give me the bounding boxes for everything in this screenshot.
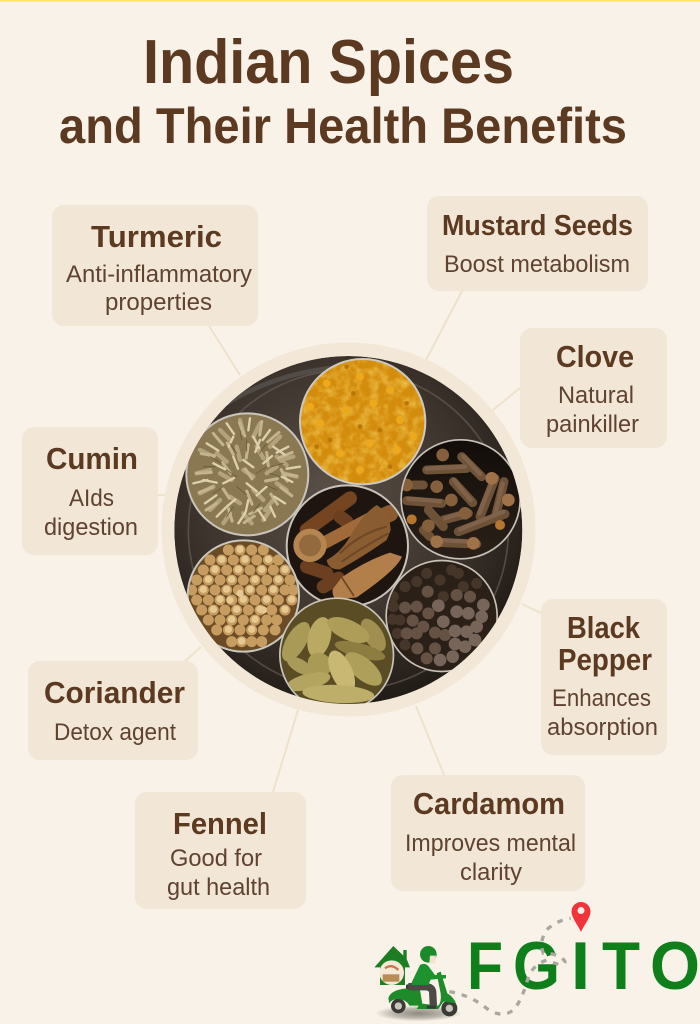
card: turmeric: properties: [105, 289, 212, 316]
connector lines: [158, 291, 541, 792]
tin: cumin: [185, 412, 310, 536]
icon: delivery scooter: [374, 946, 462, 1021]
card: fennel: gut health: [167, 874, 270, 901]
scooter body: [388, 988, 423, 1006]
masala dabba: [174, 356, 522, 713]
card: cardamom: [391, 775, 585, 891]
steel tray: [174, 356, 522, 704]
central spice tray: [162, 342, 536, 716]
card: clove: Natural: [558, 382, 634, 409]
ground shadow: [375, 1005, 462, 1021]
card: black pepper: Pepper: [558, 642, 652, 677]
card: mustard seeds: Boost metabolism: [444, 251, 630, 278]
card: black pepper: Black: [567, 610, 641, 645]
tin: coriander: [187, 539, 300, 653]
card: clove: Clove: [556, 339, 634, 374]
card: fennel: Good for: [170, 845, 262, 872]
house box: [374, 946, 410, 985]
logo: FGITO: [374, 902, 700, 1021]
card: cardamom: Improves mental: [405, 830, 576, 857]
delivery route: [449, 918, 571, 1014]
card: cardamom: Cardamom: [413, 786, 565, 821]
tin: centre bark spice: [286, 484, 409, 608]
icon: map pin: [572, 902, 590, 932]
card: black pepper: absorption: [547, 714, 658, 741]
card: mustard seeds: [427, 196, 648, 291]
top accent line: [0, 0, 700, 2]
tin: clove: [400, 439, 521, 560]
card: black pepper: [541, 599, 667, 755]
card: turmeric: [52, 205, 258, 326]
card: cumin: digestion: [44, 514, 138, 541]
card: cardamom: clarity: [460, 859, 522, 886]
card: coriander: Coriander: [44, 675, 185, 710]
title: Indian Spices: [143, 28, 514, 97]
card: turmeric: Turmeric: [91, 219, 222, 254]
wordmark: I: [571, 928, 590, 1004]
card: cumin: AIds: [69, 485, 114, 512]
card: coriander: [28, 661, 198, 760]
title: and Their Health Benefits: [59, 98, 627, 154]
card: clove: [520, 328, 667, 448]
card: black pepper: Enhances: [552, 685, 651, 712]
card: clove: painkiller: [546, 411, 639, 438]
tin: black pepper: [385, 560, 498, 672]
card: cumin: [22, 427, 158, 555]
card: coriander: Detox agent: [54, 719, 176, 746]
wordmark: G: [513, 928, 560, 1004]
card: mustard seeds: Mustard Seeds: [442, 210, 633, 242]
wordmark: F: [467, 928, 503, 1004]
wordmark: T: [602, 928, 640, 1004]
rider: [408, 987, 433, 1006]
outer cream ring: [162, 342, 536, 716]
wheels: [391, 999, 406, 1013]
card: turmeric: Anti-inflammatory: [66, 261, 252, 288]
card: fennel: [135, 792, 306, 909]
card: fennel: Fennel: [173, 806, 267, 841]
tin: cardamom: [276, 597, 394, 713]
title: [59, 28, 627, 154]
tin: turmeric: [299, 358, 427, 485]
wordmark: [467, 928, 700, 1004]
card: cumin: Cumin: [46, 441, 138, 476]
